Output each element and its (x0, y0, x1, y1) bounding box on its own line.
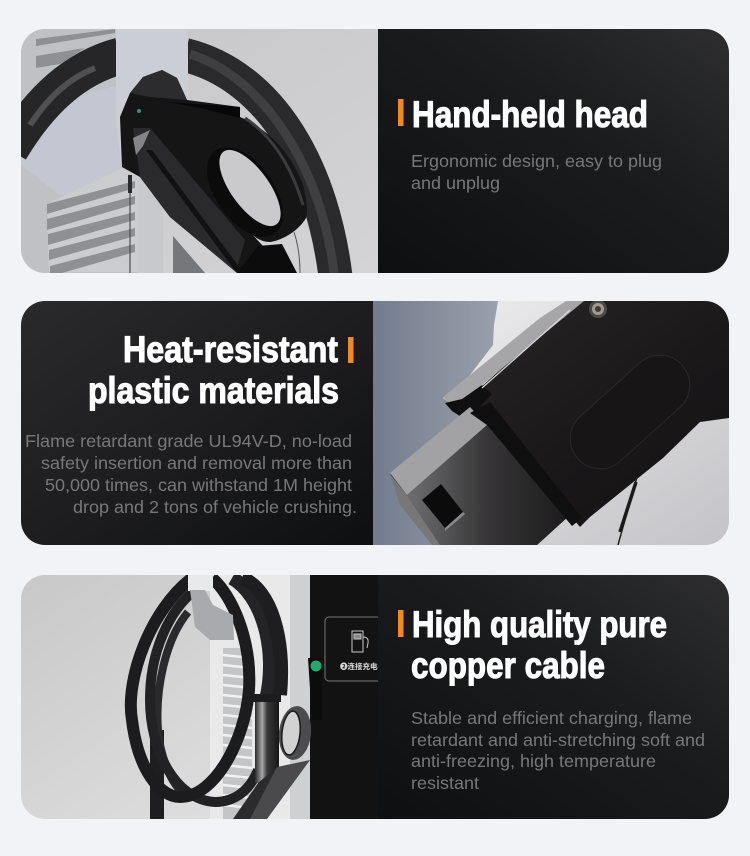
panel: copper cable (21, 575, 729, 819)
description: Stable and efficient charging, flame (411, 708, 692, 728)
thin cable (618, 477, 637, 545)
accent bar (398, 99, 404, 126)
silver latch (443, 301, 584, 406)
description: safety insertion and removal more than (41, 453, 352, 473)
photo: coiled cable on charger (21, 575, 395, 819)
text panel: copper cable (378, 575, 729, 819)
text panel: heat-resistant (21, 301, 373, 545)
handle ring (250, 760, 310, 819)
photo: handle hanging on bracket (10, 29, 378, 290)
photo: connector close-up (373, 300, 729, 545)
description (25, 431, 357, 517)
text panel: hand-held head (378, 29, 729, 273)
gun barrel (255, 695, 279, 783)
description: anti-freezing, high temperature (411, 751, 656, 771)
bolt (589, 300, 607, 318)
handle (120, 70, 307, 273)
description: and unplug (411, 173, 500, 193)
description: resistant (411, 773, 479, 793)
icon: fuel pump (352, 631, 368, 652)
description (411, 151, 662, 193)
panel: heat-resistant plastic materials (21, 300, 729, 545)
vertical cable (150, 730, 164, 819)
coils (157, 612, 188, 790)
heading (411, 603, 667, 686)
description (411, 708, 705, 793)
plug front (407, 425, 570, 545)
description: 50,000 times, can withstand 1M height (45, 475, 352, 495)
description: drop and 2 tons of vehicle crushing. (73, 497, 357, 517)
description: retardant and anti-stretching soft and (411, 730, 705, 750)
hose (185, 55, 337, 290)
label box (324, 616, 378, 682)
heading: Heat-resistant (123, 328, 338, 370)
heading: plastic materials (88, 369, 339, 411)
label text: ❷连接充电枪 (340, 661, 385, 671)
heading: High quality pure (412, 603, 667, 645)
green LED (310, 660, 322, 672)
heading: copper cable (411, 644, 605, 686)
description: Flame retardant grade UL94V-D, no-load (25, 431, 352, 451)
bracket (116, 29, 188, 114)
panel: hand-held head (10, 29, 729, 290)
heading: Hand-held head (412, 93, 648, 135)
heading (88, 328, 339, 411)
connector body (390, 301, 729, 545)
hook (188, 575, 234, 640)
description: Ergonomic design, easy to plug (411, 151, 662, 171)
black cabinet (310, 575, 378, 819)
accent bar (348, 337, 354, 363)
accent bar (398, 610, 404, 637)
